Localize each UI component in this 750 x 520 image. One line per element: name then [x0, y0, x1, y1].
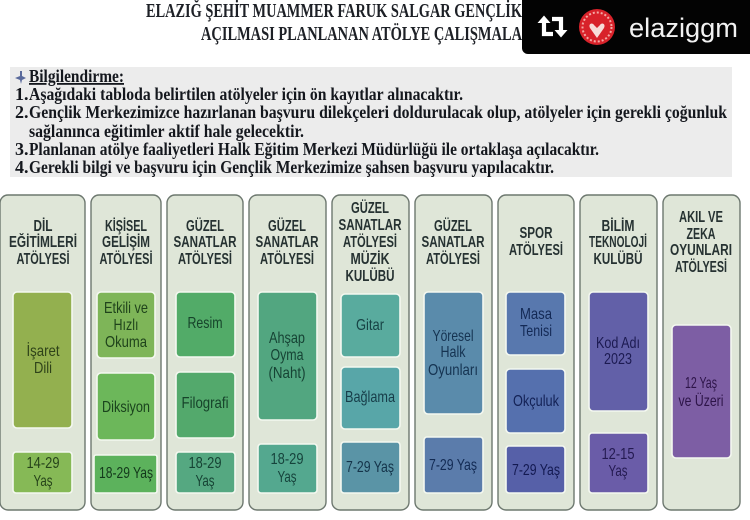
- panel: güzel sanatlar 2: SANATLAR: [256, 234, 319, 251]
- panel: bilim teknoloji: Kod Adı: [596, 335, 640, 352]
- title: AÇILMASI PLANLANAN ATÖLYE ÇALIŞMALA: [201, 22, 522, 45]
- panel: kişisel gelişim: GELİŞİM: [102, 233, 150, 251]
- panel: müzik kulübü: ATÖLYESİ: [343, 232, 397, 251]
- panel: güzel sanatlar 1: SANATLAR: [174, 234, 237, 251]
- panel: kişisel gelişim: ATÖLYESİ: [100, 249, 152, 268]
- panel: güzel sanatlar 1: GÜZEL: [186, 216, 224, 235]
- panel: güzel sanatlar 1: [167, 195, 243, 510]
- panel: müzik kulübü: GÜZEL: [351, 198, 389, 217]
- panel: bilim teknoloji: 12-15: [602, 446, 635, 463]
- panel: dil eğitimleri: İşaret: [26, 341, 60, 360]
- icon: bullet arrow: [15, 71, 26, 84]
- panel: bilim teknoloji: Yaş: [608, 463, 628, 480]
- information list: 2.: [15, 102, 28, 122]
- panel: kişisel gelişim: Diksiyon: [102, 399, 150, 416]
- panel: güzel sanatlar 2: ATÖLYESİ: [260, 249, 314, 268]
- panel: spor: [498, 195, 574, 510]
- title: ELAZIĞ ŞEHİT MUAMMER FARUK SALGAR GENÇLİK: [146, 0, 522, 22]
- panel: dil eğitimleri: 14-29: [26, 455, 60, 472]
- panel: güzel sanatlar 1: Filografi: [182, 395, 228, 412]
- panel: akıl ve zeka: [663, 195, 740, 510]
- panel: güzel sanatlar 2: GÜZEL: [268, 216, 306, 235]
- panel: bilim teknoloji: [580, 195, 657, 510]
- panel: akıl ve zeka: 12 Yaş: [685, 375, 717, 392]
- panel: bilim teknoloji: TEKNOLOJİ: [589, 233, 647, 251]
- panel: kişisel gelişim: 18-29 Yaş: [99, 465, 153, 482]
- panel: bilim teknoloji: KULÜBÜ: [594, 249, 642, 268]
- panel: müzik kulübü: [332, 195, 409, 510]
- panel: kişisel gelişim: [91, 195, 161, 510]
- information list: [15, 84, 727, 177]
- panel: akıl ve zeka: AKIL VE: [679, 209, 723, 226]
- panel: güzel sanatlar 1: Yaş: [196, 473, 214, 490]
- panel: müzik kulübü: 7-29 Yaş: [346, 459, 394, 476]
- panel: spor: Tenisi: [520, 323, 552, 340]
- panel: müzik kulübü: MÜZİK: [350, 249, 390, 268]
- panel: güzel sanatlar 3: Yöresel: [432, 328, 474, 345]
- panel: güzel sanatlar 1: Resim: [188, 315, 222, 332]
- panel: güzel sanatlar 3: [415, 195, 492, 510]
- panel: dil eğitimleri: Yaş: [34, 473, 52, 490]
- panel: bilim teknoloji: BİLİM: [602, 217, 634, 235]
- panel: bilim teknoloji: 2023: [604, 351, 632, 368]
- panel: dil eğitimleri: [0, 195, 85, 510]
- panel: güzel sanatlar 2: Oyma: [270, 347, 304, 364]
- information list: Aşağıdaki tabloda belirtilen atölyeler için ön kayıtlar alınacaktır.: [29, 84, 463, 104]
- panel: güzel sanatlar 2: [249, 195, 326, 510]
- repost badge: [522, 0, 750, 54]
- panel: spor: 7-29 Yaş: [512, 462, 560, 479]
- panel: güzel sanatlar 2: Yaş: [278, 469, 296, 486]
- panel: güzel sanatlar 3: 7-29 Yaş: [429, 457, 477, 474]
- account name: elaziggm: [629, 13, 738, 43]
- icon: red emblem: [579, 9, 615, 45]
- panel: güzel sanatlar 1: ATÖLYESİ: [178, 249, 232, 268]
- panel: spor: SPOR: [520, 225, 553, 242]
- panel: akıl ve zeka: ZEKA: [686, 226, 716, 243]
- panel: dil eğitimleri: Dili: [34, 360, 52, 377]
- panel: güzel sanatlar 3: Halk: [440, 344, 466, 361]
- information list: Gerekli bilgi ve başvuru için Gençlik Merkezimize şahsen başvuru yapılacaktır.: [29, 157, 554, 177]
- information list: 1.: [15, 84, 28, 104]
- panel: müzik kulübü: Bağlama: [345, 389, 395, 406]
- panel: güzel sanatlar 3: Oyunları: [428, 362, 478, 379]
- panel: dil eğitimleri: ATÖLYESİ: [16, 249, 70, 268]
- information heading: Bilgilendirme:: [29, 66, 124, 86]
- panel: akıl ve zeka: ve Üzeri: [678, 392, 724, 410]
- title: [146, 0, 522, 45]
- panel: information: [10, 66, 732, 177]
- panel: spor: ATÖLYESİ: [509, 240, 563, 259]
- panel: kişisel gelişim: Etkili ve: [104, 300, 148, 317]
- panel: spor: Masa: [520, 306, 552, 323]
- panel: müzik kulübü: KULÜBÜ: [346, 266, 394, 285]
- panel: müzik kulübü: SANATLAR: [338, 217, 402, 234]
- panel: kişisel gelişim: Hızlı: [114, 317, 138, 334]
- information list: Planlanan atölye faaliyetleri Halk Eğitim Merkezi Müdürlüğü ile ortaklaşa açılacaktır.: [29, 139, 599, 159]
- information list: 3.: [15, 139, 28, 159]
- panel: güzel sanatlar 3: GÜZEL: [434, 216, 472, 235]
- panel: dil eğitimleri: DİL: [34, 217, 53, 235]
- panel: dil eğitimleri: EĞİTİMLERİ: [9, 232, 77, 251]
- panel: güzel sanatlar 2: 18-29: [270, 451, 304, 468]
- panel: müzik kulübü: Gitar: [356, 317, 385, 334]
- information list: 4.: [15, 157, 28, 177]
- panel: kişisel gelişim: Okuma: [105, 334, 147, 351]
- panel: spor: Okçuluk: [513, 393, 560, 410]
- panel: güzel sanatlar 3: ATÖLYESİ: [426, 249, 480, 268]
- panel: güzel sanatlar 3: SANATLAR: [422, 234, 485, 251]
- information list: sağlanınca eğitimler aktif hale gelecektir.: [29, 121, 304, 141]
- panel: kişisel gelişim: KİŞİSEL: [105, 217, 147, 235]
- icon: repost arrows: [538, 16, 568, 38]
- panel: güzel sanatlar 2: Ahşap: [269, 330, 305, 347]
- panel: güzel sanatlar 1: 18-29: [188, 455, 222, 472]
- panel: güzel sanatlar 2: (Naht): [268, 365, 306, 382]
